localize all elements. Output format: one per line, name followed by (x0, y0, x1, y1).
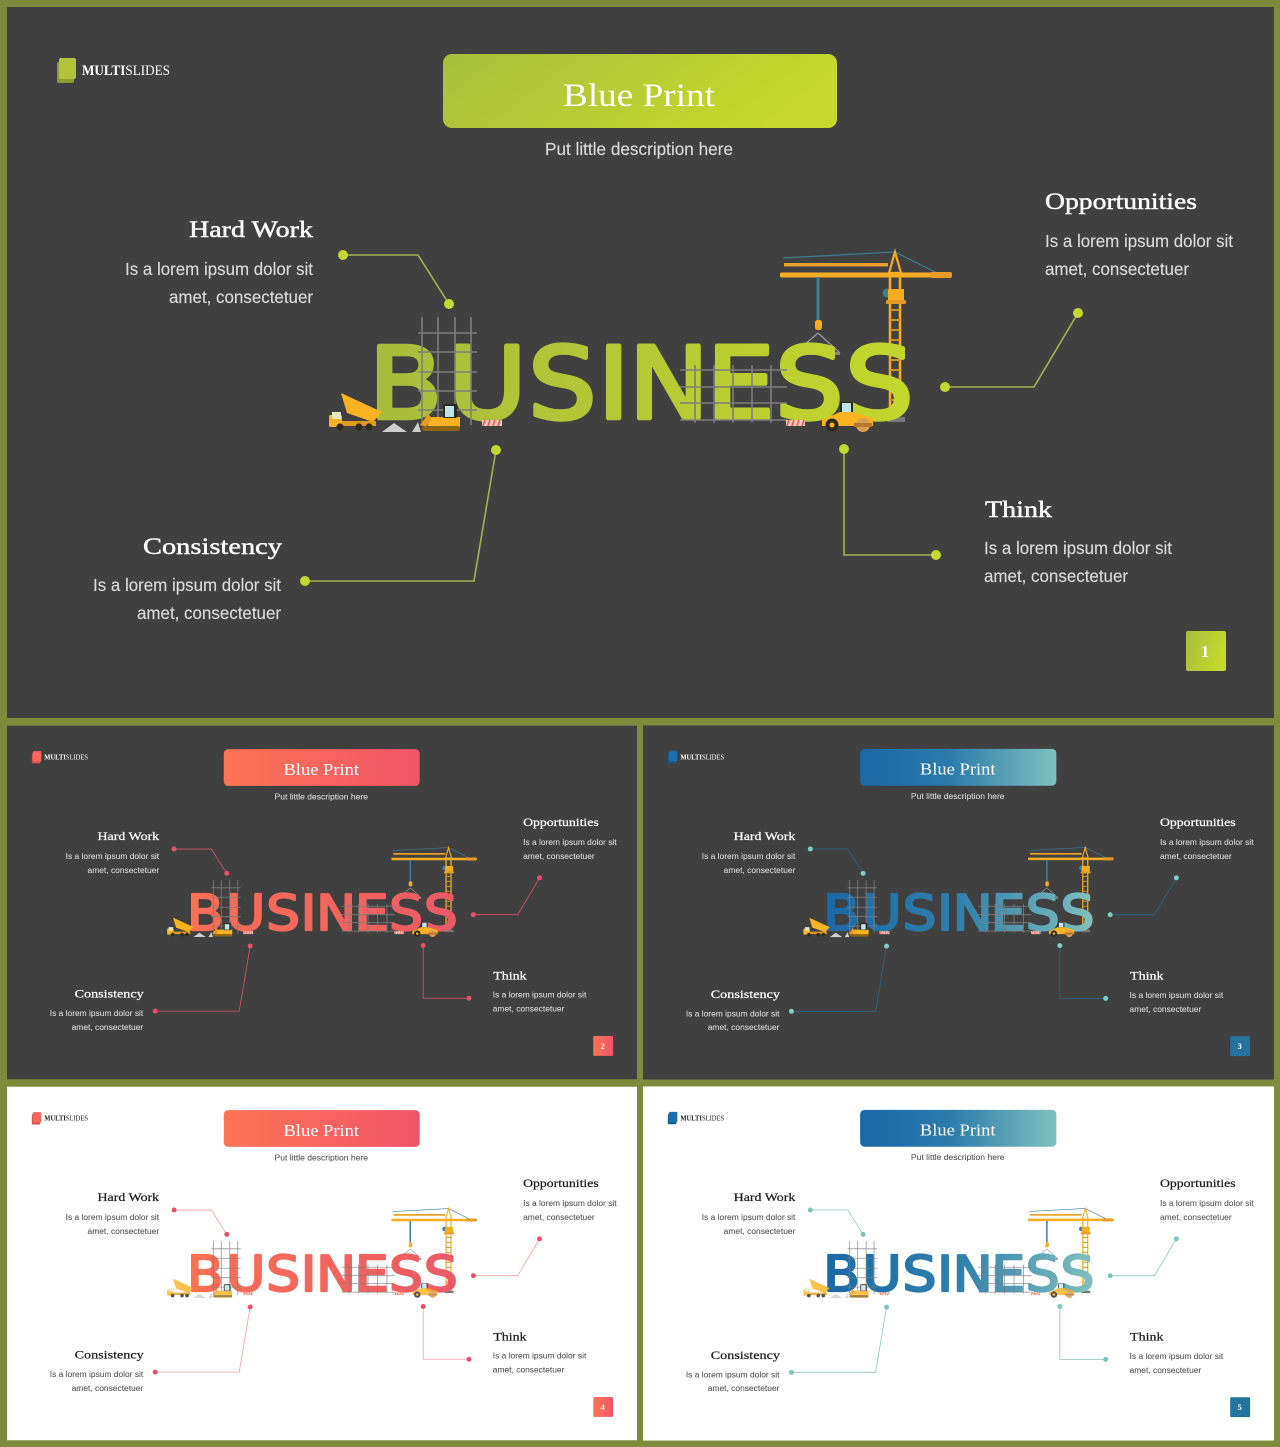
title bar (860, 749, 1056, 786)
text block: hard work: Is a lorem ipsum dolor sit (66, 851, 160, 861)
illustration: crane (391, 848, 477, 932)
text block: opportunities: Is a lorem ipsum dolor sit (523, 837, 617, 847)
text block: opportunities: Is a lorem ipsum dolor sit (1160, 837, 1254, 847)
connector: consistency (300, 445, 501, 586)
text block: hard work (702, 830, 796, 875)
illustration: scaffolds and vehicles (167, 1241, 438, 1298)
panel: slide 2 coral on dark (7, 726, 637, 1080)
text block: hard work: Is a lorem ipsum dolor sit (702, 1212, 796, 1222)
text block: opportunities: Is a lorem ipsum dolor sit (523, 1198, 617, 1208)
connector: hard work (808, 846, 866, 876)
text block: opportunities: amet, consectetuer (523, 851, 595, 861)
text block: hard work: amet, consectetuer (169, 287, 313, 307)
word: BUSINESS: BUSINESS (187, 885, 458, 943)
connector: consistency (789, 1305, 889, 1375)
text block: think: Think (1130, 969, 1164, 982)
text block: think: Is a lorem ipsum dolor sit (1130, 990, 1224, 1000)
text block: consistency (686, 988, 780, 1032)
illustration: crane (1028, 847, 1114, 932)
text block: think: amet, consectetuer (493, 1365, 564, 1375)
logo (32, 751, 88, 764)
page number (593, 1036, 613, 1056)
page number: 4 (601, 1402, 606, 1412)
title bar: Blue Print (563, 78, 715, 114)
text block: consistency (50, 1349, 144, 1393)
text block: opportunities: amet, consectetuer (523, 1212, 595, 1222)
text block: hard work (66, 830, 160, 875)
page number (1230, 1036, 1250, 1056)
subtitle: Put little description here (545, 139, 733, 159)
title bar (860, 1110, 1056, 1147)
panel: slide 5 blue on white (643, 1086, 1274, 1441)
illustration: scaffolds and vehicles (167, 880, 438, 937)
page number: 1 (1201, 642, 1209, 661)
illustration: crane (391, 1209, 477, 1293)
text block: consistency: amet, consectetuer (708, 1383, 780, 1393)
text block: opportunities: amet, consectetuer (1160, 851, 1232, 861)
word: BUSINESS: BUSINESS (369, 327, 913, 442)
connector: opportunities (1108, 875, 1179, 917)
title bar: Blue Print (920, 1121, 996, 1140)
connector: hard work (338, 250, 454, 309)
text block: think: Think (1130, 1330, 1164, 1343)
text block: think: Is a lorem ipsum dolor sit (984, 538, 1172, 558)
logo: MULTISLIDES (680, 1114, 724, 1122)
illustration: crane (1028, 1208, 1114, 1293)
text block: consistency: Consistency (75, 988, 144, 1001)
text block: opportunities: Opportunities (1160, 1177, 1236, 1190)
logo: MULTISLIDES (82, 63, 170, 79)
text block: hard work: Hard Work (734, 830, 796, 843)
connector: think (1057, 943, 1108, 1001)
text block: opportunities (1160, 1177, 1254, 1222)
text block: opportunities: Opportunities (1160, 816, 1236, 829)
illustration: scaffolds and vehicles (803, 1241, 1074, 1298)
text block: think: amet, consectetuer (1130, 1004, 1201, 1014)
text block: think: Is a lorem ipsum dolor sit (493, 990, 587, 1000)
title bar (224, 1110, 420, 1147)
text block: consistency: Consistency (711, 988, 780, 1001)
text block: consistency: amet, consectetuer (708, 1022, 780, 1032)
text block: think (493, 1330, 587, 1375)
text block: hard work: amet, consectetuer (88, 865, 159, 875)
connector: hard work (172, 847, 229, 876)
page number: 3 (1238, 1041, 1242, 1051)
connector: consistency (789, 944, 889, 1014)
logo: MULTISLIDES (44, 1115, 88, 1123)
connector: think (421, 943, 471, 1001)
text block: think: amet, consectetuer (984, 566, 1128, 586)
text block: think: Think (493, 1330, 527, 1343)
text block: consistency: Is a lorem ipsum dolor sit (686, 1369, 780, 1379)
title bar: Blue Print (283, 760, 360, 779)
panel: slide 3 blue on dark (643, 726, 1274, 1080)
text block: hard work (702, 1191, 796, 1236)
text block: think: Is a lorem ipsum dolor sit (1130, 1351, 1224, 1361)
title bar: Blue Print (283, 1121, 360, 1140)
text block: opportunities: amet, consectetuer (1045, 259, 1189, 279)
text block: think: amet, consectetuer (493, 1004, 564, 1014)
connector: hard work (808, 1207, 866, 1237)
text block: hard work (66, 1191, 160, 1236)
text block: opportunities: Opportunities (523, 816, 599, 829)
word: BUSINESS: BUSINESS (823, 885, 1094, 943)
logo (32, 1112, 88, 1125)
connector: opportunities (471, 875, 542, 917)
text block: hard work: Hard Work (97, 1191, 159, 1204)
text block: opportunities (523, 1177, 617, 1222)
title bar (443, 54, 837, 128)
text block: hard work: amet, consectetuer (88, 1226, 159, 1236)
connector: hard work (172, 1208, 229, 1237)
text block: think: Think (493, 969, 527, 982)
page number (593, 1397, 613, 1417)
text block: consistency: amet, consectetuer (137, 603, 281, 623)
illustration: scaffolds and vehicles (803, 880, 1074, 937)
text block: consistency (50, 988, 144, 1032)
page number: 5 (1238, 1402, 1242, 1412)
text block: consistency: amet, consectetuer (72, 1022, 143, 1032)
logo (57, 58, 170, 83)
word: BUSINESS: BUSINESS (823, 1246, 1094, 1304)
text block: think (984, 497, 1172, 586)
title bar: Blue Print (920, 760, 996, 779)
panel: slide 4 coral on white (7, 1086, 637, 1440)
subtitle: Put little description here (275, 1152, 368, 1162)
subtitle: Put little description here (911, 791, 1005, 801)
text block: opportunities: Is a lorem ipsum dolor sit (1160, 1198, 1254, 1208)
text block: consistency: Is a lorem ipsum dolor sit (93, 575, 281, 595)
text block: opportunities: amet, consectetuer (1160, 1212, 1232, 1222)
connector: opportunities (940, 308, 1083, 392)
connector: think (839, 444, 941, 560)
text block: hard work: amet, consectetuer (724, 865, 795, 875)
connector: consistency (153, 1305, 253, 1375)
text block: hard work: Hard Work (734, 1191, 796, 1204)
text block: think (1130, 1330, 1224, 1375)
illustration: scaffolds and vehicles (329, 317, 873, 432)
text block: consistency (93, 534, 282, 623)
text block: think (493, 969, 587, 1014)
title bar (224, 749, 420, 786)
text block: consistency: Is a lorem ipsum dolor sit (50, 1008, 144, 1018)
text block: think: Think (985, 497, 1052, 523)
panel: slide 1 green on dark (7, 7, 1274, 718)
text block: opportunities (1160, 816, 1254, 861)
subtitle: Put little description here (911, 1152, 1005, 1162)
logo: MULTISLIDES (44, 754, 88, 762)
page number: 2 (601, 1041, 605, 1051)
text block: opportunities (1045, 189, 1233, 279)
text block: hard work: Hard Work (189, 217, 313, 243)
text block: hard work: Is a lorem ipsum dolor sit (702, 851, 796, 861)
connector: opportunities (1108, 1236, 1179, 1278)
text block: think: Is a lorem ipsum dolor sit (493, 1351, 587, 1361)
word: BUSINESS: BUSINESS (187, 1246, 458, 1304)
text block: consistency (686, 1349, 780, 1393)
logo (668, 1112, 724, 1124)
text block: hard work: Is a lorem ipsum dolor sit (125, 259, 313, 279)
text block: hard work: Is a lorem ipsum dolor sit (66, 1212, 160, 1222)
logo: MULTISLIDES (680, 753, 724, 761)
connector: consistency (153, 944, 253, 1014)
text block: think: amet, consectetuer (1130, 1365, 1201, 1375)
text block: hard work (125, 217, 313, 307)
subtitle: Put little description here (275, 791, 368, 801)
page number (1230, 1397, 1250, 1417)
text block: consistency: amet, consectetuer (72, 1383, 143, 1393)
text block: opportunities: Opportunities (1045, 189, 1197, 215)
text block: consistency: Consistency (711, 1349, 780, 1362)
text block: consistency: Consistency (75, 1349, 144, 1362)
illustration: crane (780, 252, 952, 422)
connector: opportunities (471, 1236, 542, 1278)
text block: think (1130, 969, 1224, 1014)
connector: think (421, 1304, 471, 1362)
text block: opportunities: Is a lorem ipsum dolor sit (1045, 231, 1233, 251)
text block: opportunities: Opportunities (523, 1177, 599, 1190)
logo (668, 751, 724, 763)
text block: consistency: Is a lorem ipsum dolor sit (686, 1008, 780, 1018)
text block: hard work: amet, consectetuer (724, 1226, 795, 1236)
text block: consistency: Is a lorem ipsum dolor sit (50, 1369, 144, 1379)
text block: hard work: Hard Work (97, 830, 159, 843)
text block: consistency: Consistency (143, 534, 282, 560)
page number (1186, 631, 1226, 671)
text block: opportunities (523, 816, 617, 861)
connector: think (1057, 1304, 1108, 1362)
